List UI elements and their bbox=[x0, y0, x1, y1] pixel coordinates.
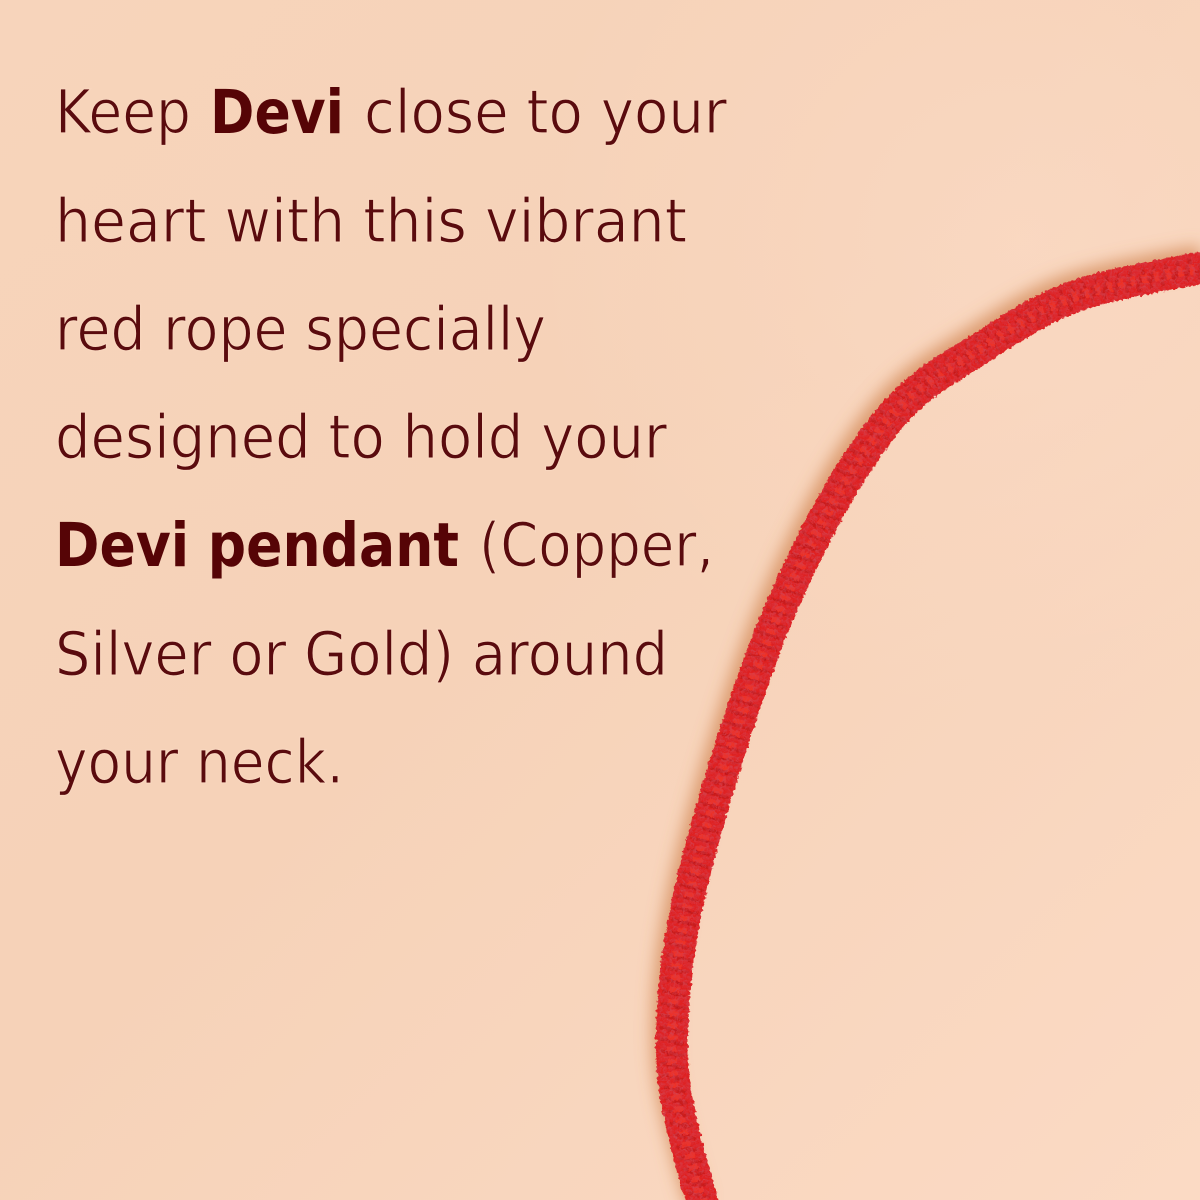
text block bbox=[55, 77, 728, 798]
line 6: Silver or Gold) around bbox=[55, 619, 668, 690]
line 3: red rope specially bbox=[55, 294, 546, 365]
rope shadow bbox=[663, 256, 1200, 1200]
red rope bbox=[665, 261, 1200, 1200]
line 5 bbox=[55, 510, 714, 581]
line 5: Devi pendant bbox=[55, 510, 459, 581]
line 2: heart with this vibrant bbox=[55, 186, 687, 257]
line 7: your neck. bbox=[55, 727, 344, 798]
line 1: Devi bbox=[210, 77, 344, 148]
line 4: designed to hold your bbox=[55, 402, 668, 473]
line 1: Keep bbox=[55, 77, 191, 148]
line 1: close to your bbox=[364, 77, 728, 148]
line 5: (Copper, bbox=[479, 510, 714, 581]
line 1 bbox=[55, 77, 728, 148]
